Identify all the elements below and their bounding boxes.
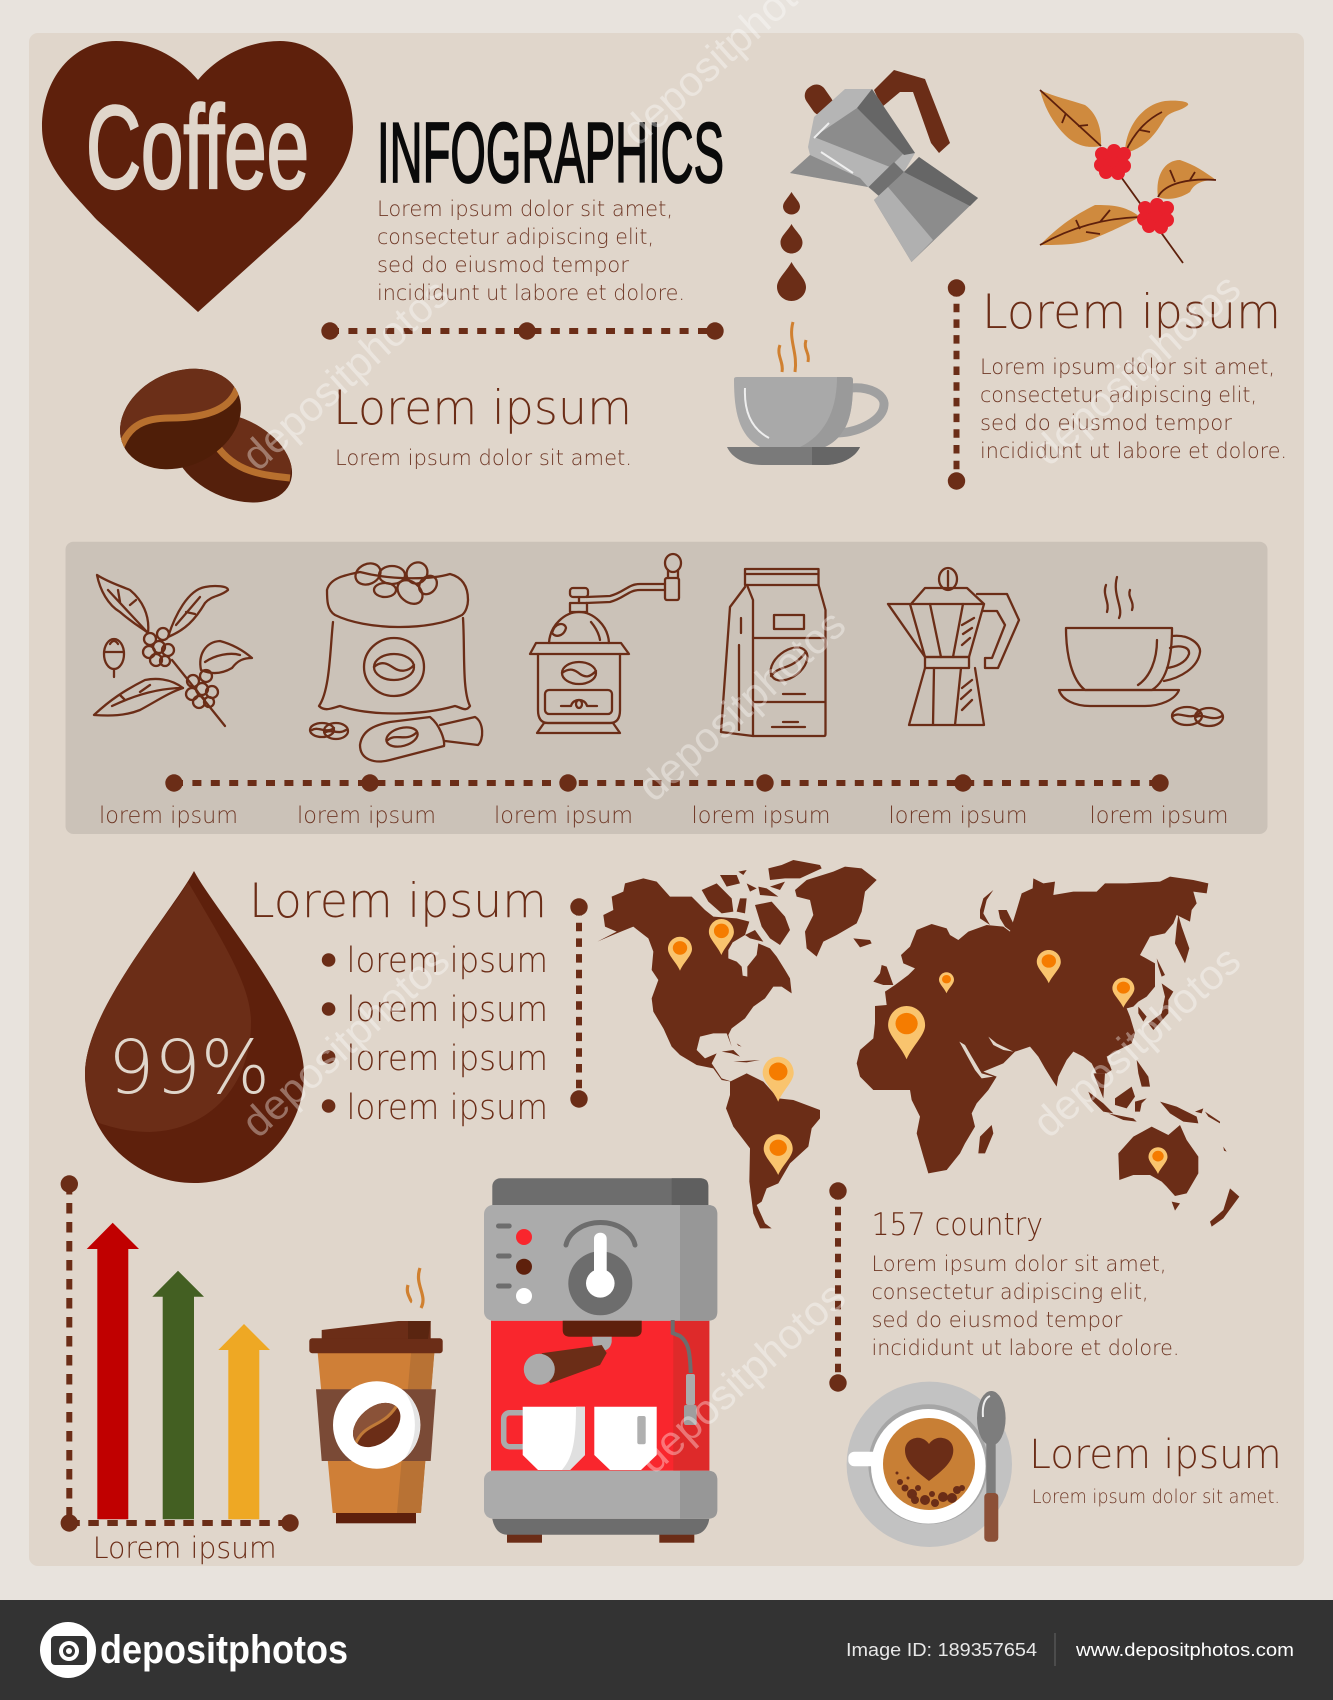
footer bar bbox=[0, 1600, 1333, 1700]
bullet list: lorem ipsum bbox=[346, 990, 548, 1030]
title: Coffee: Coffee bbox=[86, 82, 309, 214]
icon: espresso machine bbox=[484, 1178, 717, 1543]
dotted connector: top bbox=[321, 322, 724, 340]
big drop with percentage bbox=[85, 871, 304, 1183]
intro text block: consectetur adipiscing elit, bbox=[377, 225, 654, 250]
watermarks: depositphotos bbox=[628, 1272, 854, 1482]
heading: beans: Lorem ipsum bbox=[333, 381, 632, 436]
line icon: coffee plant bbox=[94, 575, 252, 726]
intro text block: Lorem ipsum dolor sit amet, bbox=[377, 197, 673, 222]
watermarks: depositphotos bbox=[1023, 264, 1249, 474]
map pins bbox=[668, 919, 1168, 1175]
intro text block: sed do eiusmod tempor bbox=[377, 253, 629, 278]
text block: branch bbox=[980, 355, 1287, 464]
icon: moka pot pouring bbox=[790, 70, 978, 262]
heading: branch: Lorem ipsum bbox=[982, 285, 1281, 340]
text block: country: consectetur adipiscing elit, bbox=[872, 1280, 1148, 1305]
timeline labels: lorem ipsum bbox=[692, 803, 830, 829]
icon: takeaway cup bbox=[309, 1268, 443, 1523]
icon: camera logo bbox=[40, 1622, 96, 1678]
timeline labels: lorem ipsum bbox=[297, 803, 436, 829]
bullet list bbox=[322, 941, 548, 1128]
timeline labels: lorem ipsum bbox=[494, 803, 633, 829]
watermarks: depositphotos bbox=[232, 269, 458, 479]
chart label: Lorem ipsum bbox=[93, 1531, 277, 1565]
map: Eurasia, Africa and Oceania bbox=[853, 877, 1239, 1227]
timeline labels: lorem ipsum bbox=[1090, 803, 1228, 829]
line icon: cup and saucer bbox=[1059, 577, 1223, 726]
arrow bar chart bbox=[61, 1175, 299, 1532]
watermarks: depositphotos bbox=[628, 600, 854, 810]
text block: branch: Lorem ipsum dolor sit amet, bbox=[980, 355, 1275, 380]
timeline labels: lorem ipsum bbox=[888, 803, 1028, 829]
text: top view cup: Lorem ipsum dolor sit amet. bbox=[1032, 1487, 1280, 1508]
icon: coffee beans bbox=[120, 368, 292, 502]
watermarks bbox=[232, 0, 1249, 1482]
heart title badge bbox=[42, 41, 353, 312]
line icon: sack of beans bbox=[310, 558, 482, 761]
website: www.depositphotos.com bbox=[1075, 1640, 1294, 1660]
value: 99%: 99% bbox=[108, 1025, 270, 1111]
heading: top view cup: Lorem ipsum bbox=[1029, 1432, 1282, 1478]
timeline labels: lorem ipsum bbox=[99, 803, 238, 829]
line icon: moka pot bbox=[888, 568, 1019, 725]
panel: process band bbox=[66, 542, 1268, 834]
bullet list: lorem ipsum bbox=[346, 1088, 548, 1128]
line icon: coffee grinder bbox=[530, 554, 681, 733]
text block: branch: consectetur adipiscing elit, bbox=[980, 383, 1257, 408]
timeline bbox=[165, 774, 1169, 792]
image id: Image ID: 189357654 bbox=[846, 1640, 1037, 1660]
timeline labels bbox=[99, 803, 1228, 829]
dotted connector: right bbox=[948, 279, 965, 490]
line icon: coffee bag bbox=[721, 569, 826, 736]
icon: coffee cup top view bbox=[847, 1382, 1012, 1547]
intro text block bbox=[377, 197, 685, 306]
bullet list: lorem ipsum bbox=[346, 1039, 548, 1079]
text: beans: Lorem ipsum dolor sit amet. bbox=[335, 446, 632, 471]
map: Americas and Greenland bbox=[597, 860, 877, 1228]
icon: coffee drops bbox=[777, 192, 806, 301]
heading: 157 country: 157 country bbox=[872, 1207, 1043, 1243]
bullet list: lorem ipsum bbox=[346, 941, 548, 981]
world map bbox=[597, 860, 1239, 1228]
watermarks: depositphotos bbox=[232, 936, 458, 1146]
icon: coffee branch bbox=[1040, 90, 1216, 263]
text block: branch: incididunt ut labore et dolore. bbox=[980, 439, 1287, 464]
dotted connector: list bbox=[570, 898, 588, 1108]
watermarks: depositphotos bbox=[1023, 936, 1249, 1146]
icon: grey cup with steam bbox=[727, 322, 884, 465]
text block: country: incididunt ut labore et dolore. bbox=[872, 1336, 1180, 1361]
text block: country: Lorem ipsum dolor sit amet, bbox=[872, 1252, 1166, 1277]
heading: list: Lorem ipsum bbox=[249, 874, 547, 929]
intro text block: incididunt ut labore et dolore. bbox=[377, 281, 685, 306]
logo wordmark: depositphotos bbox=[100, 1628, 348, 1672]
text block: country bbox=[872, 1252, 1180, 1361]
title: Infographics: INFOGRAPHICS bbox=[377, 106, 724, 201]
dotted connector: country bbox=[829, 1182, 847, 1392]
text block: country: sed do eiusmod tempor bbox=[872, 1308, 1123, 1333]
text block: branch: sed do eiusmod tempor bbox=[980, 411, 1232, 436]
